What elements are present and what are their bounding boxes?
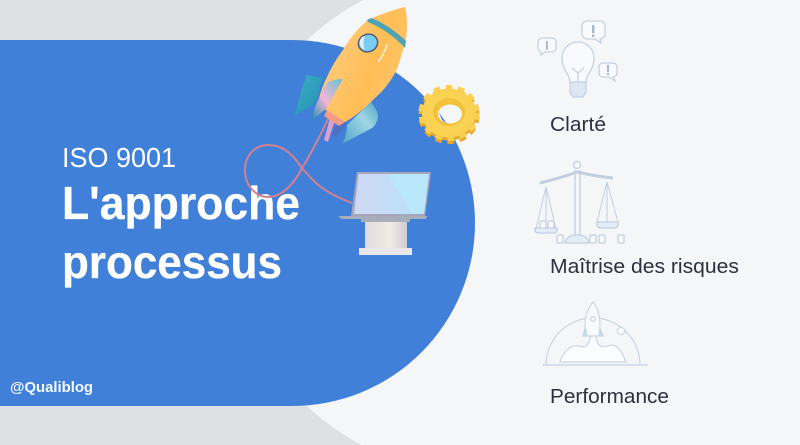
title (62, 177, 300, 288)
bubble right (599, 63, 617, 81)
title: L'approche (62, 177, 300, 229)
rocket highlight (378, 44, 387, 62)
small planet (617, 327, 625, 335)
illustration: gear (422, 88, 476, 140)
illustration: laptop on stand (338, 172, 431, 255)
cable linking laptop and rocket (245, 115, 352, 203)
rocket band (367, 18, 406, 48)
label: Maîtrise des risques: Maîtrise des risques (550, 256, 739, 278)
base (565, 235, 589, 243)
laptop screen (354, 174, 429, 214)
weights (557, 235, 624, 243)
gear hole (438, 104, 462, 124)
rocket left fin (295, 75, 323, 115)
bubble left (538, 38, 556, 55)
rocket centre fin (312, 79, 343, 120)
post (575, 170, 580, 243)
gear inner ring (433, 98, 465, 126)
stand (365, 220, 407, 249)
beam (540, 172, 613, 183)
panel: blue title shape (0, 40, 475, 406)
credit: @Qualiblog: @Qualiblog (10, 379, 93, 396)
rocket nozzle (324, 110, 345, 126)
left pan (535, 187, 557, 233)
bubble top (582, 21, 605, 43)
bulb base (570, 82, 586, 97)
screen reflection (388, 174, 429, 214)
gear shadow side (422, 92, 476, 140)
dome arc (546, 318, 640, 365)
icon: light bulb with speech bubbles (538, 21, 617, 97)
icon: balance scales (535, 162, 624, 243)
rocket window (355, 30, 381, 56)
rocket body (318, 7, 407, 122)
rocket right fin (342, 102, 378, 144)
rocket flames (324, 118, 347, 142)
launch rocket (583, 302, 603, 336)
heading: ISO 9001: ISO 9001 (62, 142, 176, 173)
right pan (597, 182, 618, 228)
ground line (543, 364, 648, 366)
illustration: rocket (295, 7, 407, 144)
title: processus (62, 236, 282, 288)
label: Clarté: Clarté (550, 114, 606, 136)
bulb (562, 42, 594, 82)
icon: rocket launch (543, 302, 648, 365)
label: Performance: Performance (550, 386, 669, 408)
stand foot (359, 248, 412, 255)
background: light circular panel (228, 0, 800, 445)
laptop base (338, 216, 427, 222)
smoke cloud (560, 336, 626, 362)
gear teeth and face (422, 88, 476, 138)
laptop frame (351, 172, 431, 216)
